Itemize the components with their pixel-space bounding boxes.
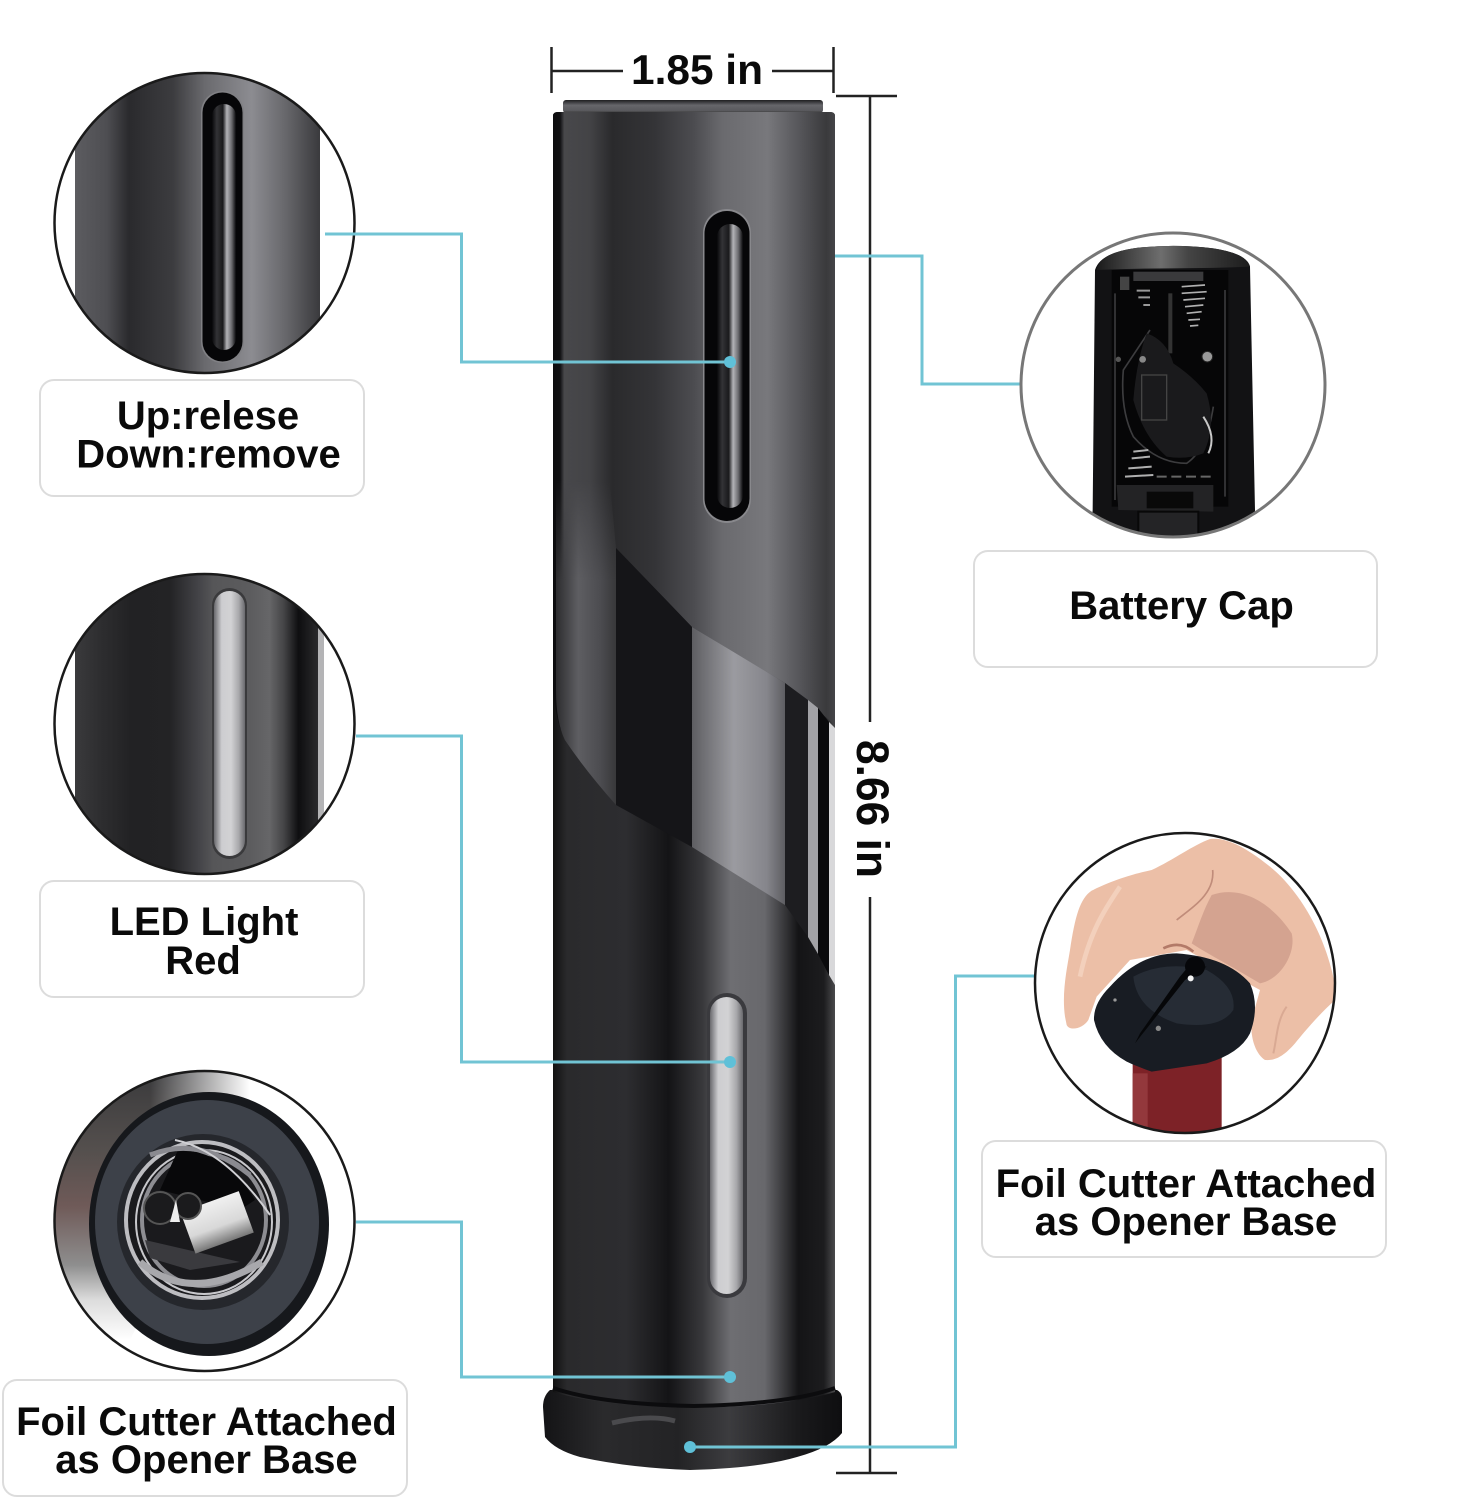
right edge highlight — [829, 722, 835, 985]
label: foil cutter left: Foil Cutter Attached — [16, 1400, 397, 1444]
dimension: width 1.85 in: 1.85 in — [631, 46, 763, 93]
dimension: width 1.85 in — [551, 46, 834, 93]
arrow: LED light connector — [356, 736, 736, 1068]
panel: opener base detail circle — [54, 1070, 355, 1371]
base ring — [543, 1390, 842, 1470]
light spiral band — [692, 627, 785, 905]
spiral black edge — [818, 708, 829, 975]
dimension: height 8.66 in — [836, 96, 898, 1473]
label: foil cutter right: Foil Cutter Attached — [996, 1162, 1376, 1206]
dark spiral bar — [785, 683, 808, 937]
label: battery cap: Battery Cap — [1069, 584, 1294, 628]
panel: battery cap detail circle — [1021, 233, 1325, 542]
label: up release, down remove: Up:relese — [117, 394, 299, 438]
label: LED light red — [40, 881, 364, 997]
label: LED light red: LED Light — [110, 900, 298, 944]
panel: switch detail circle — [54, 60, 356, 390]
LED light slot — [707, 993, 747, 1298]
panel: LED light detail circle — [54, 560, 354, 890]
spiral highlight — [808, 700, 818, 954]
dark spiral panel — [616, 548, 692, 847]
left light strip — [556, 504, 616, 804]
label: up release, down remove — [40, 380, 364, 496]
label: up release, down remove: Down:remove — [76, 432, 341, 476]
label: foil cutter left — [3, 1380, 407, 1496]
label: foil cutter right — [982, 1141, 1386, 1257]
lower body — [553, 112, 835, 1408]
panel: foil cutter in use circle — [1035, 833, 1335, 1137]
arrow: release switch connector — [325, 234, 736, 368]
arrow: foil cutter connector — [684, 976, 1035, 1453]
dimension: height 8.66 in: 8.66 in — [847, 740, 898, 878]
arrow: battery cap connector — [835, 256, 1020, 384]
label: battery cap — [974, 551, 1377, 667]
label: foil cutter right: as Opener Base — [1035, 1200, 1337, 1244]
label: LED light red: Red — [165, 939, 241, 983]
body lower contact shadow — [553, 1388, 835, 1406]
upper body — [553, 112, 835, 805]
upper release slot — [703, 209, 751, 523]
product: electric wine opener body — [543, 100, 842, 1470]
cap top — [563, 100, 823, 113]
arrow: opener base connector — [356, 1222, 736, 1383]
base highlight — [612, 1418, 675, 1423]
label: foil cutter left: as Opener Base — [55, 1438, 358, 1482]
